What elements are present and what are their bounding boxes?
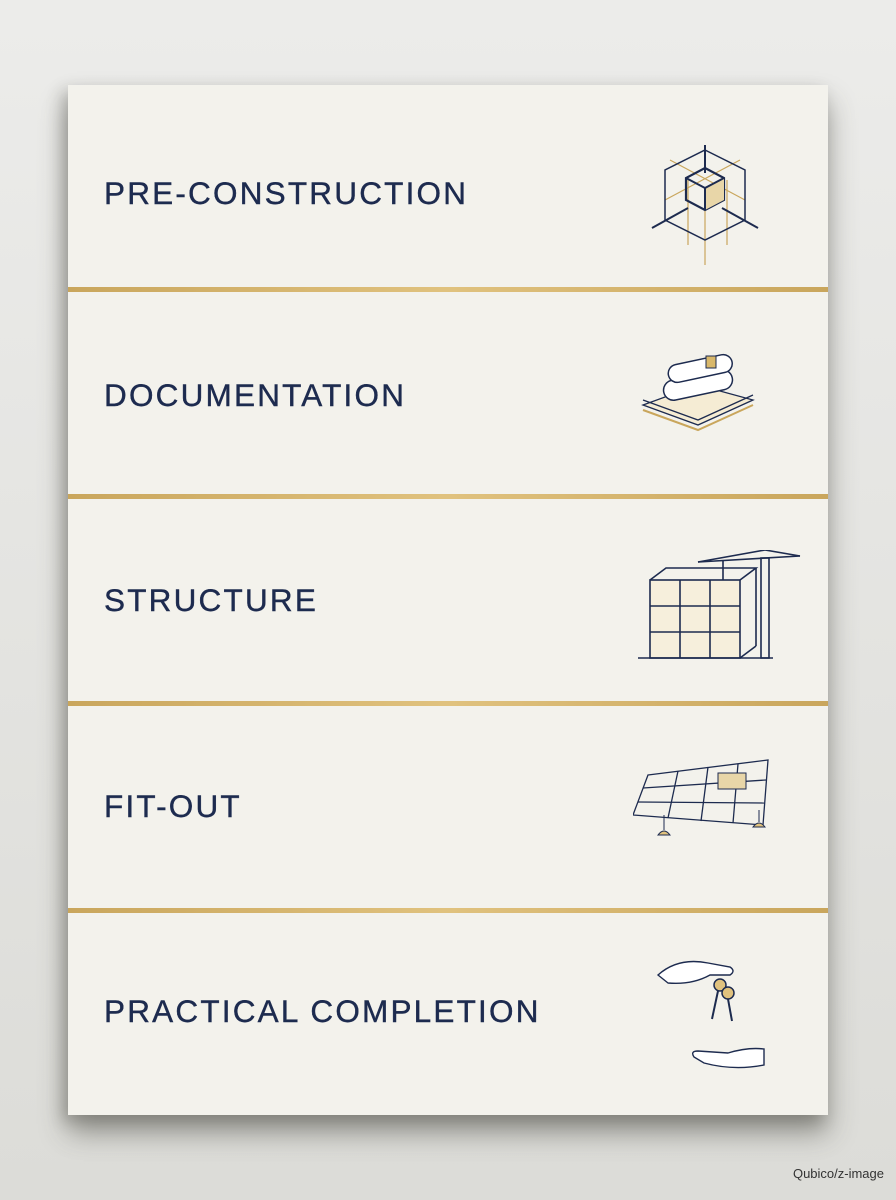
icon: cube	[652, 145, 758, 265]
heading: practical completion: PRACTICAL COMPLETION	[104, 993, 541, 1029]
heading: pre-construction: PRE-CONSTRUCTION	[104, 175, 468, 211]
heading: documentation: DOCUMENTATION	[104, 377, 406, 413]
icon: hand over keys	[657, 960, 765, 1068]
icon: building frame with crane	[638, 550, 800, 659]
credit: Qubico/z-image	[793, 1166, 884, 1181]
icon: blueprint rolls	[641, 354, 755, 432]
heading: fit-out: FIT-OUT	[104, 788, 242, 824]
icon: ceiling grid	[633, 759, 769, 836]
card	[68, 85, 828, 1115]
heading: structure: STRUCTURE	[104, 582, 318, 618]
